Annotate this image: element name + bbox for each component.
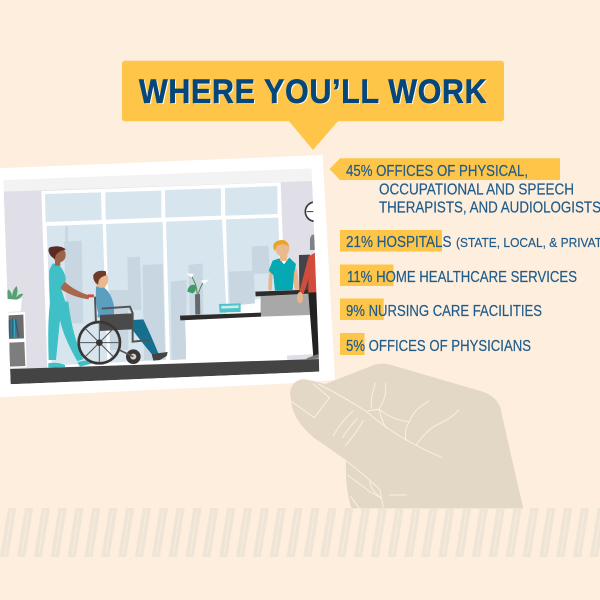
title shadow: WHERE YOU’LL WORK xyxy=(140,73,488,112)
title text: WHERE YOU’LL WORK xyxy=(139,72,487,110)
bar 9% xyxy=(340,298,384,320)
bar 11% xyxy=(340,264,394,286)
bookshelf and plant xyxy=(7,286,27,368)
floor xyxy=(10,359,320,384)
label 21% xyxy=(346,234,600,251)
patient in wheelchair xyxy=(79,271,168,364)
list of workplaces xyxy=(330,158,600,355)
label 5%: 5% OFFICES OF PHYSICIANS xyxy=(346,338,531,355)
hand xyxy=(290,364,523,508)
photo scene xyxy=(3,168,325,384)
vase flowers xyxy=(186,273,209,315)
bar 5% xyxy=(340,333,364,355)
nurse xyxy=(48,246,94,368)
desk xyxy=(180,290,313,356)
receptionist xyxy=(268,240,299,291)
man in red xyxy=(297,234,319,360)
label 9%: 9% NURSING CARE FACILITIES xyxy=(346,303,542,320)
striped ground band xyxy=(0,508,600,557)
monitor xyxy=(299,255,311,290)
label 45%: 45% OFFICES OF PHYSICAL, xyxy=(346,163,528,180)
label 45% xyxy=(346,163,600,217)
bar 45% xyxy=(330,158,560,180)
bar 21% xyxy=(340,230,442,252)
clock xyxy=(304,201,314,222)
photo card xyxy=(0,155,335,397)
title banner xyxy=(122,61,504,150)
label 45%: OCCUPATIONAL AND SPEECH xyxy=(379,181,574,198)
label 21%: 21% HOSPITALS xyxy=(346,234,452,251)
window xyxy=(41,182,287,370)
